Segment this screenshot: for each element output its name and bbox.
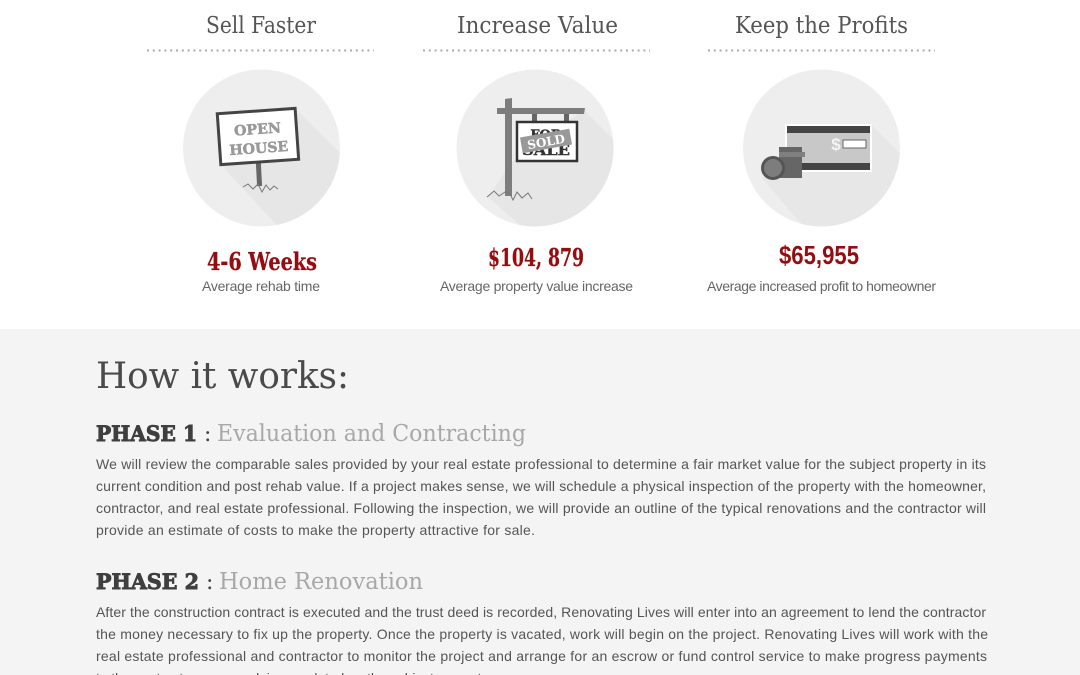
stat: 4-6 weeks: 4-6 Weeks [207, 247, 317, 276]
caption: rehab time: Average rehab time [202, 278, 320, 294]
stat: profit: $65,955 [779, 240, 859, 270]
text: phase 1 body: provide an estimate of costs to make the property attractive for sale. [96, 522, 535, 538]
caption: profit: Average increased profit to homeowner [707, 278, 936, 294]
text: phase 2 body: real estate professional and contractor to monitor the project and arrange for an escrow or fund control service to make progress payments [96, 648, 987, 664]
text: phase 1 body: We will review the comparable sales provided by your real estate professional to determine a fair market value for the subject property in its [96, 456, 986, 472]
icon: open house sign: OPEN [234, 120, 282, 140]
heading: phase 2: PHASE 2 [96, 569, 199, 594]
icon: check and coins [743, 70, 900, 226]
text: phase 1 body: current condition and post rehab value. If a project makes sense, we will schedule a physical inspection of the property with the homeowner, [96, 478, 986, 494]
column: increase value [423, 13, 650, 294]
phase 2: : [206, 570, 213, 595]
icon: sold sign: SOLD [526, 132, 566, 152]
phase 2: Home Renovation [219, 569, 423, 595]
text: phase 1 body [96, 456, 986, 538]
column: keep the profits [707, 13, 950, 294]
phase 1: Evaluation and Contracting [217, 421, 526, 447]
text: phase 2 body [96, 604, 988, 675]
heading: increase value: Increase Value [457, 13, 618, 39]
phase 1: : [204, 422, 211, 447]
icon: check and coins: $ [831, 135, 841, 154]
heading: phase 1: PHASE 1 [96, 421, 197, 446]
heading: keep the profits: Keep the Profits [735, 13, 908, 39]
text: phase 2 body: the money necessary to fix up the property. Once the property is vacated, work will begin on the project. Renovating Lives will work with the [96, 626, 988, 642]
text: phase 2 body: After the construction contract is executed and the trust deed is recorded, Renovating Lives will enter into an agreement to lend the contractor [96, 604, 986, 620]
heading: how it works: How it works: [96, 356, 349, 397]
icon: open house sign [183, 70, 340, 226]
panel: benefits [147, 15, 936, 294]
icon: sold sign: FOR [530, 128, 562, 143]
panel: how it works [0, 329, 1080, 675]
phase 1 [96, 421, 986, 538]
icon: sold sign [456, 70, 614, 226]
icon: sold sign: SALE [522, 143, 570, 159]
caption: value increase: Average property value increase [440, 278, 633, 294]
phase 2 [96, 569, 988, 675]
text: phase 1 body: contractor, and real estate professional. Following the inspection, we will provide an outline of the typical renovations and the contractor will [96, 500, 986, 516]
column: sell faster [147, 13, 375, 294]
icon: open house sign: HOUSE [229, 139, 289, 159]
heading: sell faster: Sell Faster [206, 13, 316, 39]
stat: value increase: $104, 879 [488, 243, 584, 272]
